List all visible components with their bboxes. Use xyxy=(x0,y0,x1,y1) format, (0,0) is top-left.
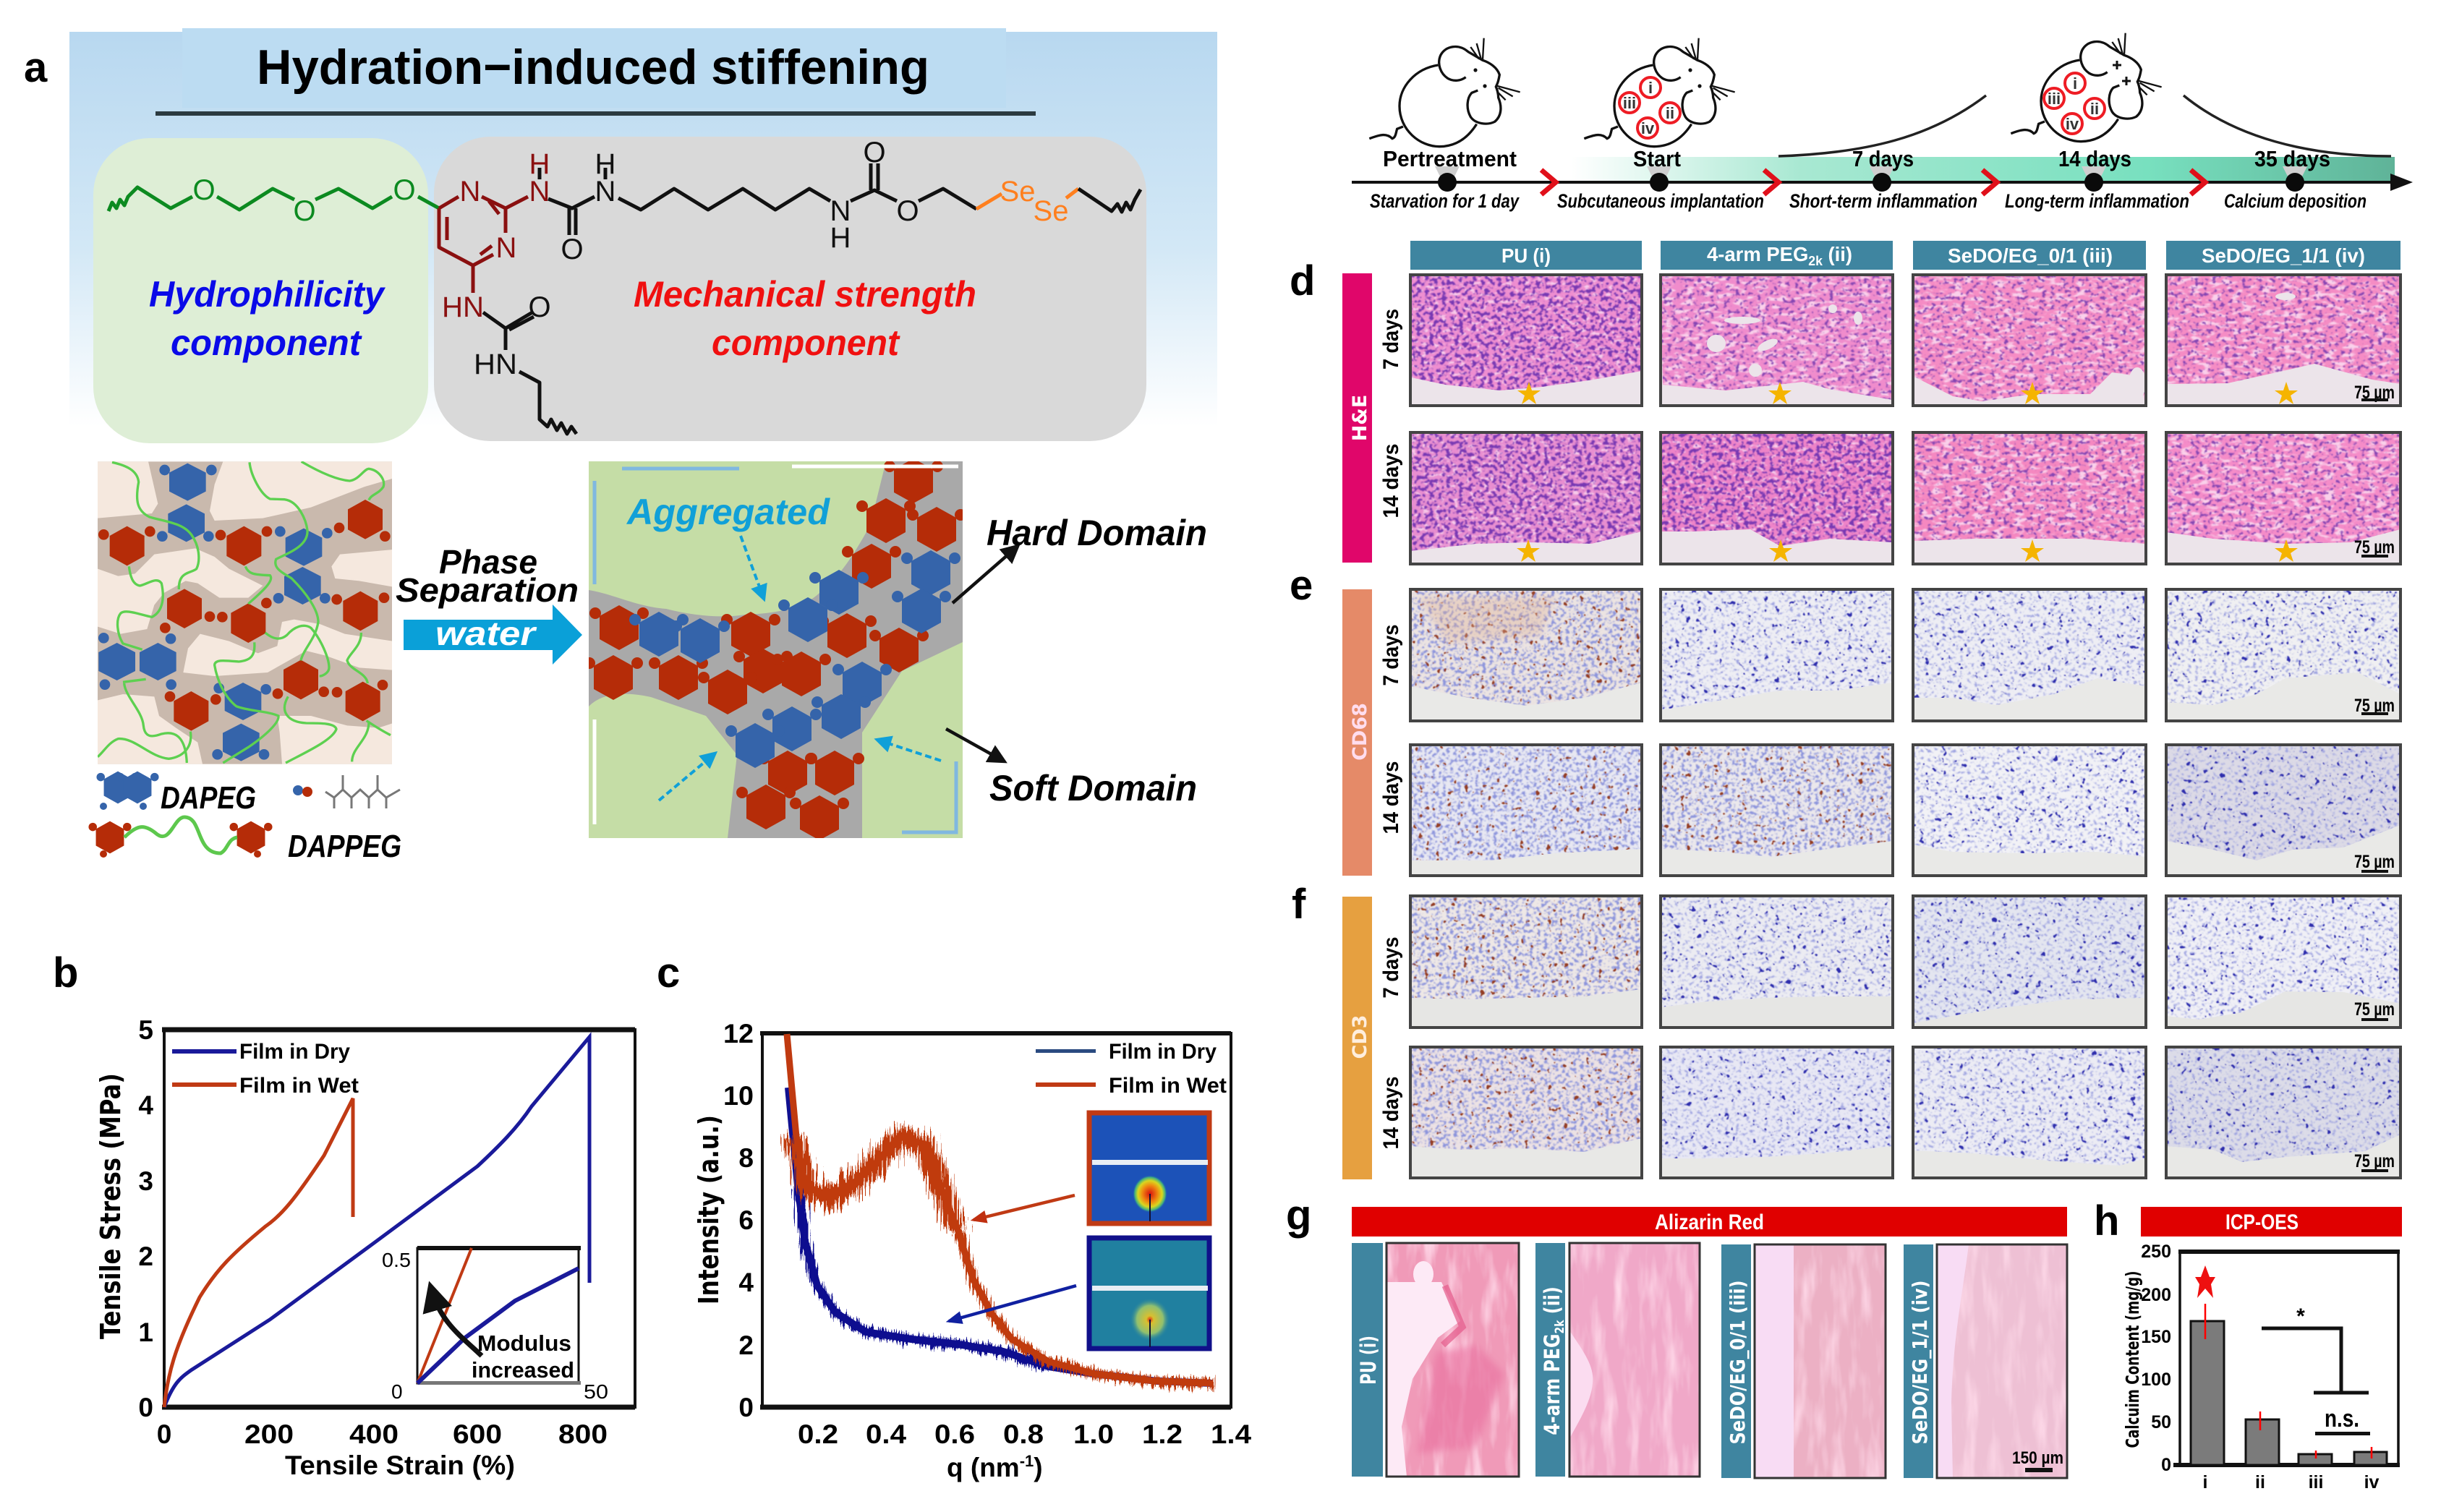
timeline markers xyxy=(1435,166,2307,195)
row labels e: 7 days xyxy=(1379,625,1403,685)
timeline stage descriptions: Short-term inflammation xyxy=(1789,190,1977,212)
timeline stage labels: Pertreatment xyxy=(1383,146,1517,171)
title rule xyxy=(156,111,1036,116)
structure atom labels: H xyxy=(595,148,615,180)
scale bar 150 µm: 150 µm xyxy=(2012,1448,2063,1468)
axis labels c: Intensity (a.u.) xyxy=(693,1115,725,1304)
histology: CD3 7 days xyxy=(1410,896,2400,1028)
arrow: water xyxy=(404,605,582,665)
panel letter g: g xyxy=(1286,1192,1311,1239)
axis labels c: 1.0 xyxy=(1073,1419,1114,1449)
panel: Alizarin 4-arm PEG: 4-arm PEG xyxy=(1541,1333,1565,1435)
arrow: wet pointer xyxy=(974,1195,1075,1220)
saxs inset dry xyxy=(1089,1238,1209,1349)
label: phase separation: Separation xyxy=(396,571,579,609)
panel: Alizarin 4-arm PEG: 2k xyxy=(1553,1320,1567,1333)
header: Alizarin Red xyxy=(1352,1207,2067,1236)
scale bars: 75 µm: 75 µm xyxy=(2354,696,2395,716)
axis labels h: 150 xyxy=(2141,1327,2171,1347)
timeline stage descriptions: Starvation for 1 day xyxy=(1370,190,1520,212)
arrow: water: water xyxy=(435,615,537,652)
row labels f xyxy=(1379,937,1403,1150)
timeline band xyxy=(1571,157,2395,181)
panel: Alizarin 4-arm PEG: (ii) xyxy=(1541,1286,1565,1320)
axis labels b: 4 xyxy=(138,1090,153,1120)
axis labels b: 600 xyxy=(453,1419,502,1449)
side bar: H&E: H&E xyxy=(1349,395,1371,441)
structure atom labels: O xyxy=(896,195,919,227)
implant site labels: ii xyxy=(1666,104,1674,122)
arrow: dry pointer xyxy=(949,1286,1076,1321)
legend: DAPEG / DAPPEG: DAPEG xyxy=(161,780,256,816)
inset: modulus: increased xyxy=(472,1357,574,1383)
significance brackets xyxy=(2262,1304,2370,1435)
panel letter h: h xyxy=(2094,1197,2119,1244)
star: significant xyxy=(2195,1265,2215,1298)
label: hard domain xyxy=(953,513,1207,603)
timeline stage labels: 14 days xyxy=(2058,146,2131,171)
scale bars: 75 µm: 75 µm xyxy=(2354,999,2395,1020)
axis labels h: 250 xyxy=(2141,1242,2171,1262)
column headers: 2k xyxy=(1808,254,1823,268)
axis labels h: 100 xyxy=(2141,1370,2171,1390)
axis labels b: Tensile Stress (MPa) xyxy=(95,1073,127,1339)
structure atom labels: O xyxy=(561,234,584,265)
axis labels c: 12 xyxy=(723,1019,754,1048)
structure atom labels: O xyxy=(192,174,216,206)
structure atom labels: N xyxy=(529,176,550,208)
scale bars: 75 µm: 75 µm xyxy=(2354,1151,2395,1171)
chart b: tensile stress vs strain xyxy=(95,1015,635,1480)
axis labels b: 5 xyxy=(138,1015,153,1045)
axis labels b xyxy=(95,1015,608,1480)
side bar: CD68: CD68 xyxy=(1349,703,1371,761)
icon: mouse pretreatment xyxy=(1369,38,1520,147)
histology: CD3 14 days xyxy=(1410,1047,2400,1178)
panel: Alizarin PU xyxy=(1352,1243,1519,1477)
structure atom labels: HN xyxy=(474,349,517,380)
saxs inset wet xyxy=(1089,1113,1209,1223)
label: phase separation: Phase xyxy=(439,543,537,581)
histology: CD68 7 days xyxy=(1410,589,2400,721)
scale bars: 75 µm: 75 µm xyxy=(2354,852,2395,872)
structure atom labels: Se xyxy=(1000,176,1035,208)
inset: modulus: 0 xyxy=(391,1380,403,1403)
axis labels b: 800 xyxy=(558,1419,608,1449)
legend: DAPEG / DAPPEG: DAPPEG xyxy=(288,829,401,864)
legend c: Film in Wet xyxy=(1109,1074,1227,1098)
title tab xyxy=(182,28,1006,108)
structure atom labels: O xyxy=(528,291,551,323)
panel letter e: e xyxy=(1290,562,1313,609)
axis labels b: 400 xyxy=(349,1419,399,1449)
implant site labels: iv xyxy=(1641,119,1655,137)
label: hydrophilicity: component xyxy=(171,323,362,363)
panel: mechanical strength component xyxy=(434,137,1146,441)
panel: Alizarin SeDO/EG 0/1: SeDO/EG_0/1 (iii) xyxy=(1726,1280,1750,1445)
column headers: SeDO/EG_1/1 (iv) xyxy=(2202,244,2365,267)
header: ICP-OES xyxy=(2141,1207,2402,1236)
axis labels c: ) xyxy=(1034,1453,1043,1482)
structure atom labels: N xyxy=(496,232,516,264)
inset: modulus: 50 xyxy=(584,1380,608,1403)
scale bars: 75 µm xyxy=(2354,383,2395,1172)
implant site labels: iii xyxy=(2048,90,2061,108)
axis labels h: ii xyxy=(2255,1472,2265,1492)
icon: mouse start xyxy=(1584,38,1735,147)
row labels d: 14 days xyxy=(1379,444,1403,518)
histology: H&E 14 days xyxy=(1410,432,2400,564)
label: hydrophilicity xyxy=(149,274,385,363)
column headers: (ii) xyxy=(1823,243,1852,265)
structure atom labels: H xyxy=(529,148,550,180)
label: soft domain xyxy=(946,729,1197,808)
chemical structure xyxy=(108,163,1141,434)
significance brackets: * xyxy=(2296,1304,2305,1328)
axis labels c: 0.4 xyxy=(866,1419,906,1449)
column headers: 4-arm PEG xyxy=(1707,243,1808,265)
row labels f: 14 days xyxy=(1379,1076,1403,1150)
axis labels c: 4 xyxy=(738,1268,754,1297)
timeline stage labels: 7 days xyxy=(1852,146,1914,171)
structure atom labels: N xyxy=(460,176,480,208)
axis labels c: -1 xyxy=(1020,1452,1034,1470)
axis labels h: iv xyxy=(2364,1472,2380,1492)
structure atom labels: N xyxy=(595,176,615,208)
dry curve xyxy=(164,1037,589,1407)
panel letter d: d xyxy=(1290,257,1315,304)
side bar: CD3: CD3 xyxy=(1349,1015,1371,1059)
implant site labels: i xyxy=(1648,79,1653,97)
axis labels c: 1.4 xyxy=(1211,1419,1251,1449)
panel letter a: a xyxy=(24,44,48,91)
column headers xyxy=(1410,241,2400,270)
axis labels c: 10 xyxy=(723,1081,754,1111)
panel letter c: c xyxy=(657,949,680,996)
axis labels h: Calcuim Content (mg/g) xyxy=(2122,1271,2143,1448)
axis labels c: 0 xyxy=(738,1393,754,1422)
inset: modulus: 0.5 xyxy=(382,1249,411,1271)
timeline stage descriptions xyxy=(1370,190,2367,212)
panel a: top background xyxy=(69,32,1217,427)
column headers: PU (i) xyxy=(1501,244,1551,267)
wet noise curve xyxy=(787,1034,1213,1383)
histology: CD68 14 days xyxy=(1410,745,2400,876)
row labels e: 14 days xyxy=(1379,761,1403,834)
axis labels c: 2 xyxy=(738,1331,754,1360)
legend b xyxy=(172,1040,359,1098)
panel: Alizarin SeDO/EG 1/1: SeDO/EG_1/1 (iv) xyxy=(1908,1280,1932,1445)
label: hydrophilicity: Hydrophilicity xyxy=(149,274,385,315)
scale bars: 75 µm: 75 µm xyxy=(2354,383,2395,403)
axis labels c: q (nm xyxy=(947,1453,1020,1482)
axis labels b: 200 xyxy=(244,1419,294,1449)
axis labels c: 0.6 xyxy=(934,1419,975,1449)
axis labels c: 1.2 xyxy=(1142,1419,1183,1449)
icon: mouse 14 days xyxy=(2011,33,2162,142)
row labels f: 7 days xyxy=(1379,937,1403,998)
timeline stage labels: Start xyxy=(1633,146,1681,171)
axis labels h: iii xyxy=(2309,1472,2323,1492)
wet curve xyxy=(164,1098,353,1407)
label: hard domain: Hard Domain xyxy=(987,513,1207,553)
panel: Alizarin 4-arm PEG xyxy=(1535,1243,1700,1477)
significance brackets: n.s. xyxy=(2325,1405,2359,1432)
axis labels b: 1 xyxy=(138,1317,153,1347)
structure atom labels: Se xyxy=(1034,195,1068,227)
axis labels b: 2 xyxy=(138,1242,153,1271)
axis labels b: 0 xyxy=(157,1419,171,1449)
dry noise curve xyxy=(788,1088,1212,1383)
panel: Alizarin SeDO/EG 1/1 xyxy=(1904,1244,2067,1478)
chart c: scattering intensity xyxy=(693,1019,1251,1482)
timeline curves xyxy=(1778,95,2391,156)
dashed arrows: aggregated xyxy=(659,536,941,800)
timeline stage labels: 35 days xyxy=(2254,146,2330,171)
timeline stage descriptions: Calcium deposition xyxy=(2224,190,2367,212)
label: soft domain: Soft Domain xyxy=(989,768,1197,808)
side bar: H&E xyxy=(1342,273,1372,563)
implant site labels: ii xyxy=(2090,100,2099,118)
legend c: Film in Dry xyxy=(1109,1040,1217,1064)
timeline stage descriptions: Long-term inflammation xyxy=(2005,190,2189,212)
axis labels b: 0 xyxy=(138,1393,153,1422)
panel: Alizarin PU: PU (i) xyxy=(1356,1336,1381,1385)
phase separated schematic xyxy=(584,458,966,840)
timeline stage descriptions: Subcutaneous implantation xyxy=(1557,190,1764,212)
header: Alizarin Red: Alizarin Red xyxy=(1655,1210,1764,1234)
structure atom labels: H xyxy=(830,222,851,254)
panel letter b: b xyxy=(53,949,78,996)
axis labels c: 0.2 xyxy=(798,1419,838,1449)
implant site labels: i xyxy=(2073,74,2077,93)
scale bars: 75 µm: 75 µm xyxy=(2354,537,2395,558)
timeline stage labels xyxy=(1383,146,2330,171)
axis labels h: 200 xyxy=(2141,1285,2171,1305)
label: mechanical strength xyxy=(634,274,976,363)
label: mechanical strength: component xyxy=(712,323,900,363)
bar chart h: calcium content xyxy=(2122,1242,2400,1492)
axis labels c: 8 xyxy=(738,1143,754,1173)
axis labels h: 50 xyxy=(2151,1412,2171,1432)
legend b: Film in Wet xyxy=(239,1074,359,1098)
structure atom labels: O xyxy=(393,174,416,206)
inset: modulus: Modulus xyxy=(477,1331,571,1356)
row labels d xyxy=(1379,309,1403,518)
axis labels h xyxy=(2122,1242,2380,1492)
structure atom labels xyxy=(192,137,1068,380)
row labels e xyxy=(1379,625,1403,834)
implant site labels: iii xyxy=(1623,94,1636,112)
title: Hydration−induced stiffening xyxy=(257,40,929,95)
label: aggregated: Aggregated xyxy=(626,492,830,532)
histology: H&E 7 days xyxy=(1410,275,2400,406)
legend: DAPEG / DAPPEG xyxy=(88,772,401,864)
implant site labels xyxy=(1623,74,2099,137)
structure atom labels: N xyxy=(830,195,851,227)
legend c xyxy=(1036,1040,1227,1098)
axis labels b: Tensile Strain (%) xyxy=(285,1451,515,1480)
panel letter f: f xyxy=(1292,881,1306,928)
label: phase separation xyxy=(396,543,579,609)
inset: modulus xyxy=(382,1246,608,1403)
row labels d: 7 days xyxy=(1379,309,1403,370)
panel: hydrophilicity component xyxy=(93,138,428,443)
axis labels b: 3 xyxy=(138,1166,153,1196)
column headers: SeDO/EG_0/1 (iii) xyxy=(1948,244,2113,267)
legend b: Film in Dry xyxy=(239,1040,350,1064)
label: mechanical strength: Mechanical strength xyxy=(634,274,976,315)
axis labels c: 6 xyxy=(738,1205,754,1235)
implant site labels: iv xyxy=(2066,115,2079,133)
structure atom labels: HN xyxy=(442,291,484,323)
panel: Alizarin SeDO/EG 0/1 xyxy=(1721,1244,1886,1478)
timeline axis arrow xyxy=(1352,174,2413,191)
structure atom labels: O xyxy=(863,137,886,168)
stars: H&E implant sites xyxy=(1517,382,2298,562)
side bar: CD68 xyxy=(1342,589,1372,876)
network schematic before water xyxy=(98,461,393,764)
axis labels c: 0.8 xyxy=(1003,1419,1044,1449)
side bar: CD3 xyxy=(1342,897,1372,1179)
axis labels h: 0 xyxy=(2161,1455,2171,1475)
structure atom labels: O xyxy=(293,195,316,227)
axis labels h: i xyxy=(2203,1472,2207,1492)
axis labels c xyxy=(693,1019,1251,1482)
header: ICP-OES: ICP-OES xyxy=(2225,1210,2299,1234)
